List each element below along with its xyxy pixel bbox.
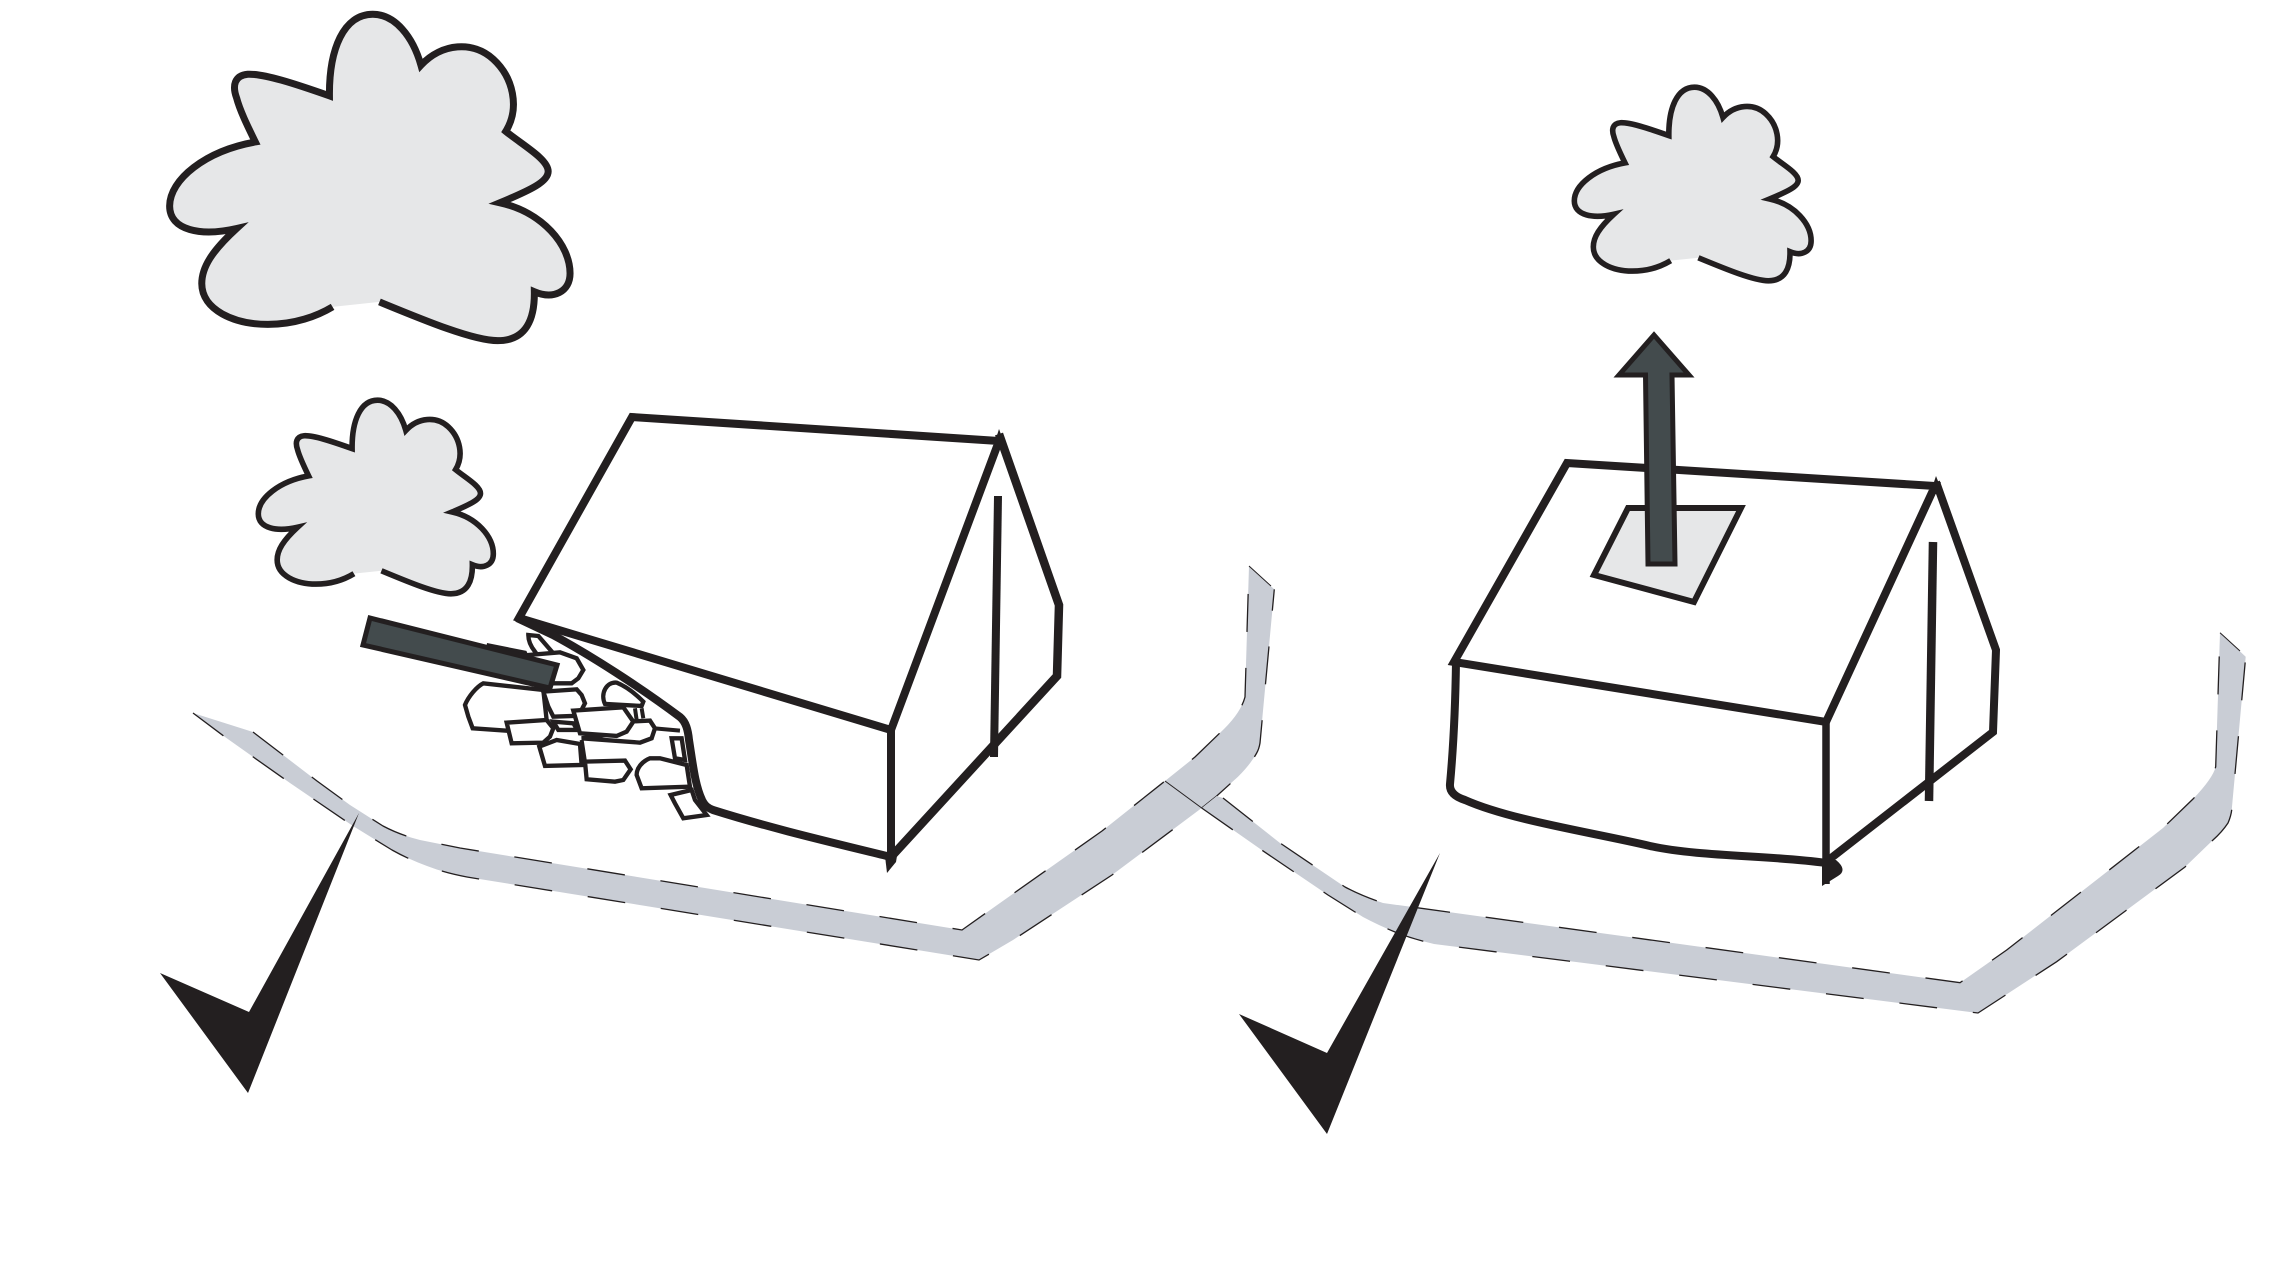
gable centre line bbox=[1929, 542, 1933, 801]
icon: small smoke cloud near pipe bbox=[258, 400, 493, 594]
exposed wall edge and foundation bbox=[517, 618, 891, 857]
icon: smoke cloud above roof vent bbox=[1574, 87, 1811, 281]
check mark: left bbox=[160, 813, 359, 1093]
stones in the wall bbox=[465, 635, 707, 818]
ground band: right house bbox=[1202, 633, 2246, 1013]
check mark: right bbox=[1239, 853, 1440, 1134]
icon: large smoke cloud bbox=[170, 14, 570, 341]
corner post bbox=[887, 730, 895, 860]
gable end wall bbox=[1826, 482, 1996, 862]
roof flashing bbox=[1594, 508, 1741, 602]
right house with roof vent bbox=[1450, 335, 1996, 886]
arrow: vent pipe upward bbox=[1619, 335, 1689, 564]
corner foot spike bbox=[885, 856, 897, 873]
peak spike bbox=[993, 429, 1006, 448]
corner foot blob bbox=[1822, 860, 1843, 886]
corner post bbox=[1822, 722, 1830, 884]
roof bbox=[519, 417, 999, 730]
roof peak spike bbox=[1930, 476, 1943, 494]
gable end wall bbox=[891, 434, 1059, 857]
left house with stone wall and side pipe bbox=[363, 417, 1059, 873]
gable centre line bbox=[994, 496, 998, 757]
roof bbox=[1454, 463, 1935, 722]
ground band: left house bbox=[193, 566, 1274, 960]
side vent pipe bbox=[363, 618, 557, 688]
front wall bbox=[1450, 662, 1826, 863]
